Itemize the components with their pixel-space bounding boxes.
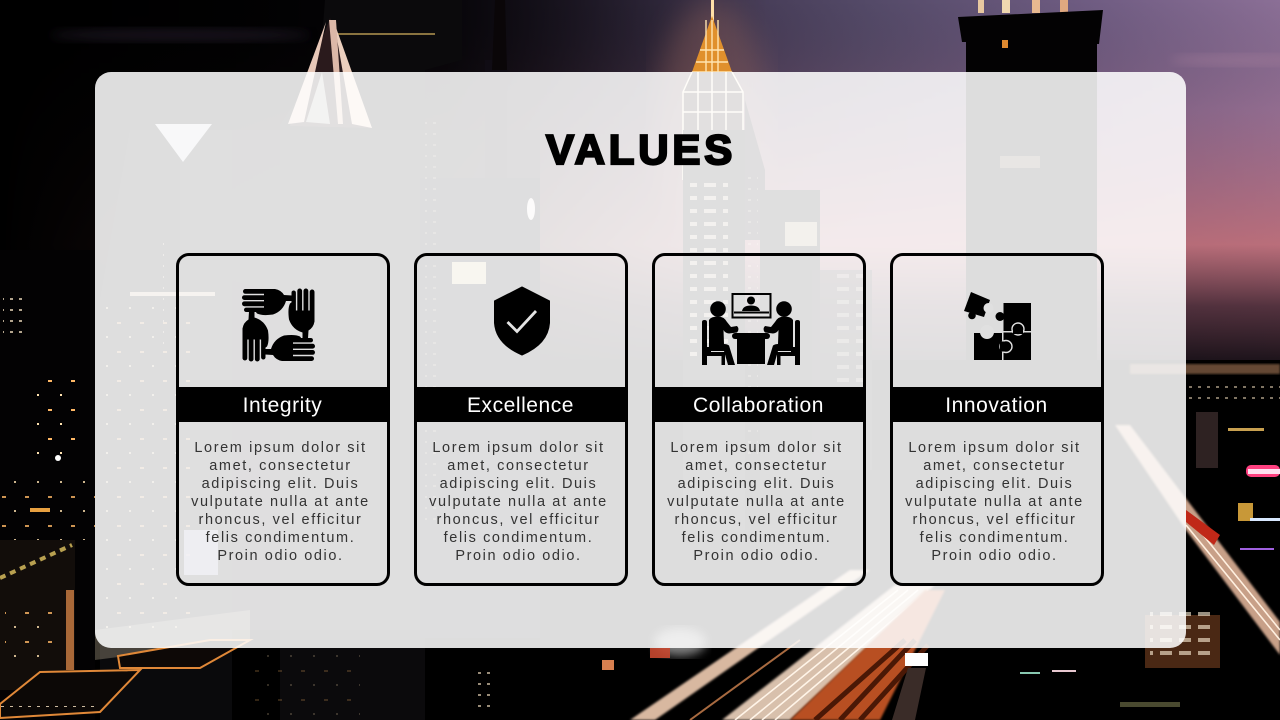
text: Innovation description: Lorem ipsum dolor sit bbox=[908, 440, 1081, 456]
gold lit tower bbox=[657, 0, 872, 530]
text: Collaboration description: Lorem ipsum dolor sit bbox=[670, 440, 843, 456]
buildings upper left bbox=[0, 0, 540, 720]
text: Excellence description: vulputate nulla at ante bbox=[429, 494, 608, 510]
text: Innovation description: rhoncus, vel efficitur bbox=[913, 512, 1076, 528]
text: Collaboration description: rhoncus, vel efficitur bbox=[675, 512, 838, 528]
card: Excellence bbox=[414, 253, 628, 586]
text: Collaboration description bbox=[667, 440, 846, 564]
lower right highway and lights bbox=[1020, 364, 1280, 707]
band: Collaboration heading: Collaboration bbox=[693, 394, 824, 417]
text: Integrity description: rhoncus, vel efficitur bbox=[199, 512, 362, 528]
text: Collaboration description: felis condimentum. bbox=[682, 530, 831, 546]
band: Excellence heading bbox=[414, 387, 628, 422]
text: Excellence description: rhoncus, vel efficitur bbox=[437, 512, 600, 528]
text: Excellence description: Proin odio odio. bbox=[455, 548, 582, 564]
text: Integrity description: Lorem ipsum dolor sit bbox=[194, 440, 367, 456]
text: Innovation description bbox=[905, 440, 1084, 564]
band: Integrity heading bbox=[176, 387, 390, 422]
text: Integrity description: Proin odio odio. bbox=[217, 548, 344, 564]
text: Excellence description: felis condimentum. bbox=[444, 530, 593, 546]
dark tower right bbox=[958, 0, 1103, 360]
text: Collaboration description: adipiscing elit. Duis bbox=[678, 476, 835, 492]
card: Innovation bbox=[890, 253, 1104, 586]
card: Integrity bbox=[176, 253, 390, 586]
icon: video meeting at table bbox=[702, 293, 800, 365]
text: Innovation description: felis condimentum. bbox=[920, 530, 1069, 546]
white pyramid spire bbox=[288, 18, 372, 128]
text: Innovation description: adipiscing elit. Duis bbox=[916, 476, 1073, 492]
text: Integrity description: adipiscing elit. Duis bbox=[202, 476, 359, 492]
text: Integrity description bbox=[191, 440, 370, 564]
icon: puzzle pieces bbox=[964, 292, 1031, 360]
text: Excellence description bbox=[429, 440, 608, 564]
icon: four interlocking hands bbox=[242, 288, 315, 362]
text: Integrity description: amet, consectetur bbox=[209, 458, 352, 474]
text: Excellence description: amet, consectetur bbox=[447, 458, 590, 474]
band: Collaboration heading bbox=[652, 387, 866, 422]
text: Collaboration description: Proin odio odio. bbox=[693, 548, 820, 564]
title: VALUES bbox=[546, 126, 736, 173]
band: Integrity heading: Integrity bbox=[243, 394, 322, 417]
text: Innovation description: vulputate nulla at ante bbox=[905, 494, 1084, 510]
text: Collaboration description: amet, consectetur bbox=[685, 458, 828, 474]
text: Excellence description: Lorem ipsum dolor sit bbox=[432, 440, 605, 456]
lower left city lights bbox=[0, 298, 360, 720]
icon: shield with check bbox=[494, 286, 550, 356]
text: Integrity description: felis condimentum. bbox=[206, 530, 355, 546]
text: Integrity description: vulputate nulla at ante bbox=[191, 494, 370, 510]
central roads with light trails bbox=[472, 570, 945, 720]
band: Innovation heading: Innovation bbox=[945, 394, 1048, 417]
text: Excellence description: adipiscing elit. Duis bbox=[440, 476, 597, 492]
translucent white panel bbox=[95, 72, 1186, 648]
text: Collaboration description: vulputate nulla at ante bbox=[667, 494, 846, 510]
band: Innovation heading bbox=[890, 387, 1104, 422]
band: Excellence heading: Excellence bbox=[467, 394, 574, 417]
card: Collaboration bbox=[652, 253, 866, 586]
text: Innovation description: Proin odio odio. bbox=[931, 548, 1058, 564]
text: Innovation description: amet, consectetur bbox=[923, 458, 1066, 474]
